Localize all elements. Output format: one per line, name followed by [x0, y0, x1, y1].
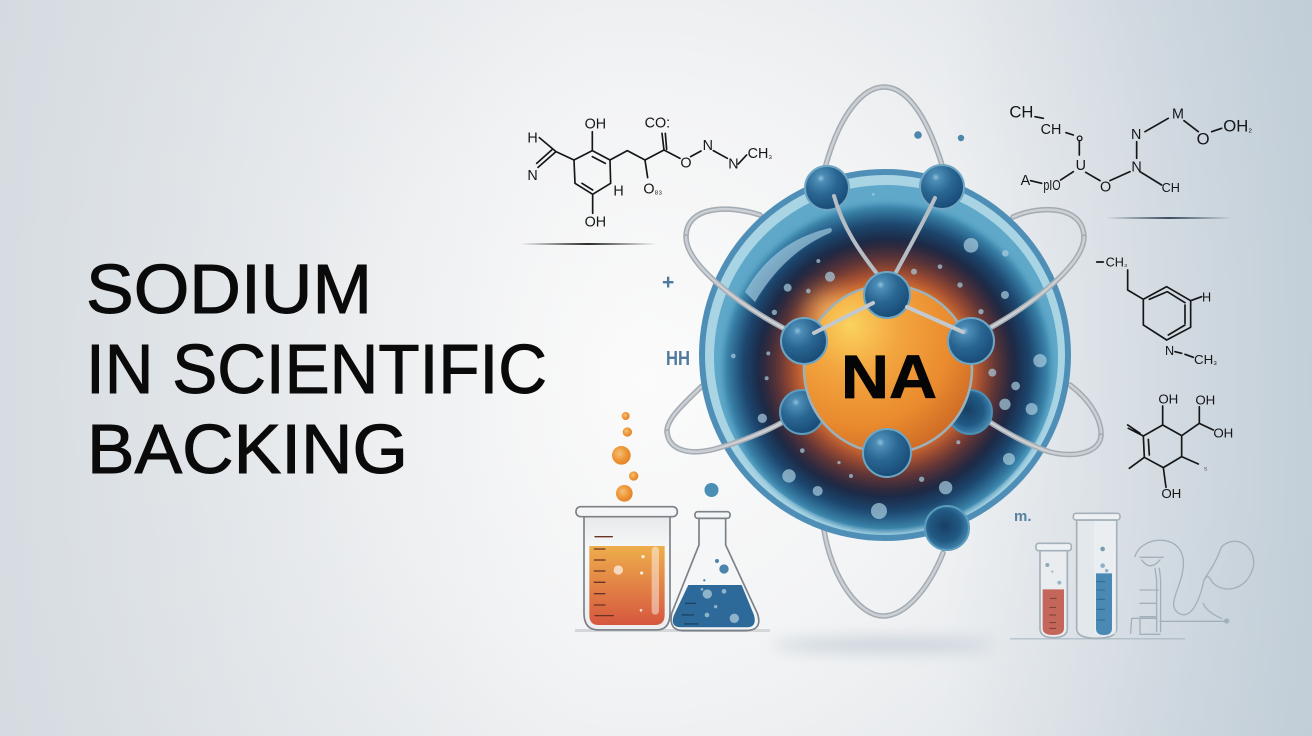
- molecule: top left structural formula: [527, 116, 772, 231]
- atom sphere with sodium core: [667, 165, 1101, 541]
- molecule: top right structural formula: U: [1076, 158, 1086, 174]
- orbits behind the sphere: [667, 87, 1101, 616]
- molecule: top right structural formula: M: [1172, 106, 1184, 122]
- orbit wires passing in front of the sphere: [667, 237, 1101, 454]
- electron: upper centre: [864, 272, 910, 318]
- molecule: top left structural formula: O: [680, 156, 691, 172]
- molecule: top left structural formula: N: [527, 168, 538, 184]
- tall test tube with blue liquid: [1073, 513, 1120, 638]
- test tube bench line: [1010, 638, 1185, 640]
- rods from the top electrons: [834, 196, 935, 275]
- molecule: top left structural formula: H: [527, 131, 538, 147]
- electron: right: [948, 318, 994, 364]
- distillation apparatus outline: [1131, 540, 1254, 634]
- electron: bottom: [863, 429, 911, 477]
- orange nucleus: [804, 285, 972, 453]
- molecule: top left structural formula: CO:: [645, 116, 670, 132]
- electron: top right: [920, 165, 964, 209]
- molecule: top left structural formula: CH₃: [748, 146, 772, 162]
- NA label: NA: [841, 343, 937, 411]
- molecule: top right structural formula: N: [1131, 160, 1142, 176]
- electron: left: [781, 318, 827, 364]
- electron: lower right: [948, 390, 992, 434]
- molecule: top right structural formula: N: [1131, 127, 1141, 143]
- blue bubble above flask: [704, 483, 718, 497]
- title: IN SCIENTIFIC: [86, 330, 547, 408]
- molecule: right ring with methyl groups: [1097, 256, 1217, 367]
- orange rising bubbles: [612, 412, 638, 502]
- divider line under top right molecule: [1106, 217, 1232, 219]
- molecule: right ring with methyl groups: CH₃: [1106, 256, 1127, 270]
- molecule: top right structural formula: CH: [1162, 181, 1180, 195]
- electron: outer lower right: [925, 506, 969, 550]
- title: [86, 250, 547, 488]
- bubbles inside the sphere: [731, 193, 1047, 519]
- electron: top left: [805, 166, 849, 210]
- molecule: top right structural formula: O: [1100, 180, 1111, 196]
- molecule: top left structural formula: H: [613, 184, 624, 200]
- electron: lower left: [780, 390, 824, 434]
- rods across the nucleus top: [814, 303, 963, 333]
- divider line under top left molecule: [520, 243, 656, 245]
- lab bench shadow under glassware: [575, 629, 770, 632]
- molecule: top right structural formula: [1009, 102, 1252, 196]
- molecule: right ring with methyl groups: H: [1202, 290, 1211, 304]
- molecule: top left structural formula: N: [703, 138, 713, 154]
- molecule: top left structural formula: OH: [585, 116, 606, 132]
- molecule: right ring with methyl groups: CH₃: [1194, 352, 1217, 367]
- molecule: top left structural formula: N: [728, 157, 739, 173]
- floor shadow under atom: [771, 640, 995, 650]
- m. label: m.: [1014, 508, 1032, 525]
- small test tube with red liquid: [1036, 543, 1071, 638]
- title: BACKING: [87, 410, 408, 488]
- plus sign: +: [662, 271, 674, 294]
- molecule: right hydroxyl ring: OH: [1195, 392, 1215, 407]
- molecule: right ring with methyl groups: N: [1165, 344, 1174, 358]
- molecule: top right structural formula: CH: [1041, 122, 1061, 138]
- molecule: top right structural formula: OH₂: [1223, 116, 1252, 135]
- H symbols: HH: [666, 348, 690, 370]
- beaker with orange liquid: [576, 507, 677, 630]
- molecule: top right structural formula: O: [1197, 129, 1210, 148]
- erlenmeyer flask with blue liquid: [671, 512, 759, 631]
- molecule: right hydroxyl ring: OH: [1213, 425, 1233, 440]
- molecule: top right structural formula: CH: [1009, 102, 1033, 121]
- molecule: top right structural formula: pIO: [1043, 178, 1061, 194]
- small floating dots: [914, 131, 964, 141]
- molecule: right hydroxyl ring: s: [1204, 466, 1208, 473]
- molecule: top right structural formula: A: [1021, 173, 1031, 189]
- molecule: right hydroxyl ring: OH: [1161, 486, 1181, 501]
- molecule: top left structural formula: O₈₃: [643, 181, 662, 197]
- molecule: right hydroxyl ring: [1128, 391, 1233, 501]
- title: SODIUM: [86, 250, 372, 328]
- molecule: top left structural formula: OH: [585, 215, 606, 231]
- molecule: right hydroxyl ring: OH: [1158, 391, 1178, 406]
